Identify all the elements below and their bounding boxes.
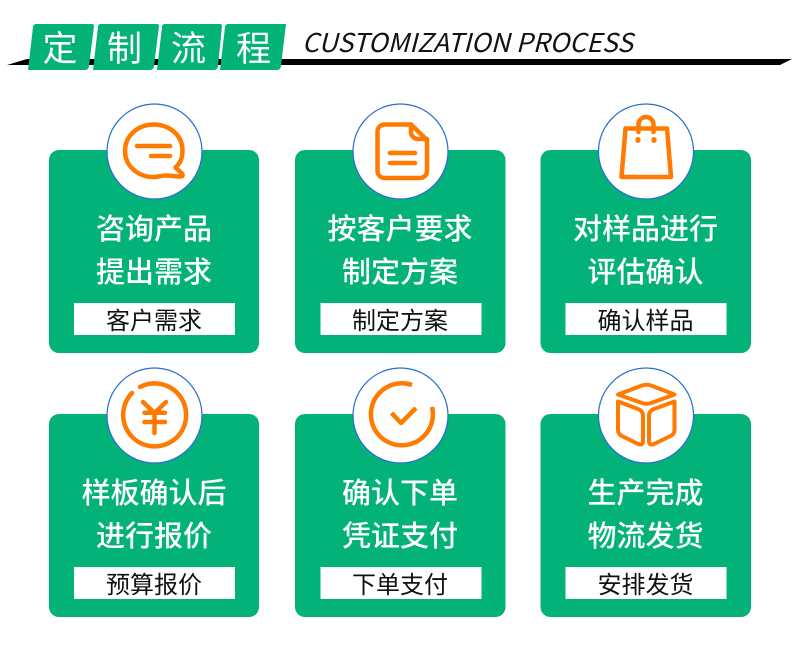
panel: step 3: 确认样品 [598, 301, 694, 336]
panel: step 6: 物流发货 [587, 513, 704, 555]
panel: step 4 [49, 368, 259, 617]
panel: step 3 [540, 104, 751, 353]
header underline bar [7, 59, 792, 65]
panel: step 4: 样板确认后 [81, 470, 227, 512]
icon: box [618, 385, 674, 445]
icon: chat bubble [125, 124, 183, 177]
panel: step 3: 对样品进行 [573, 206, 718, 248]
panel: step 2: 按客户要求 [327, 206, 473, 248]
panel: step 5: 确认下单 [342, 470, 458, 512]
icon: check circle [371, 383, 433, 445]
panel: step 5 [295, 368, 506, 617]
title tabs: 定 [42, 21, 78, 72]
icon: document [378, 124, 427, 178]
english subtitle: CUSTOMIZATION PROCESS [302, 23, 636, 60]
panel: step 6: 生产完成 [587, 470, 704, 512]
panel: step 6 [540, 368, 751, 617]
panel: step 1: 提出需求 [96, 249, 212, 291]
panel: step 2: 制定方案 [352, 301, 448, 336]
panel: step 4: 进行报价 [96, 513, 212, 555]
header [7, 21, 792, 72]
panel: step 5: 下单支付 [352, 565, 448, 600]
panel: step 6: 安排发货 [598, 565, 694, 600]
panel: step 3: 评估确认 [587, 249, 704, 291]
title tabs [28, 21, 286, 72]
panel: step 5: 凭证支付 [342, 513, 458, 555]
panel: step 4: 预算报价 [106, 565, 202, 600]
icon: yen coin [123, 383, 186, 446]
title tabs: 程 [236, 21, 271, 72]
title tabs: 制 [107, 21, 142, 72]
panel: step 1 [49, 104, 259, 353]
title tabs: 流 [171, 21, 206, 72]
panel: step 1: 客户需求 [106, 301, 202, 336]
panel: step 2 [295, 104, 506, 353]
panel: step 1: 咨询产品 [96, 206, 212, 248]
panel: step 2: 制定方案 [342, 249, 458, 291]
icon: shopping bag [622, 117, 671, 177]
